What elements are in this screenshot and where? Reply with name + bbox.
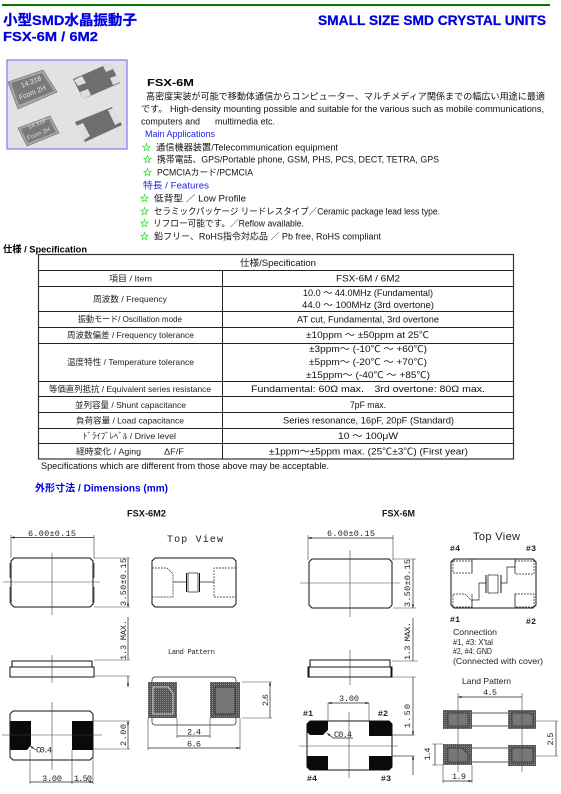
row: aging: ±1ppm～±5ppm max. (25℃±3℃) (First year)	[269, 446, 468, 456]
drawing: side view: 1.3 MAX.	[403, 622, 413, 660]
connection notes: (Connected with cover)	[453, 656, 543, 666]
label: FSX-6M: FSX-6M	[382, 508, 415, 518]
drawing: land pattern: 1.9	[452, 772, 466, 782]
drawing: bottom view: #1	[303, 709, 313, 719]
main applications list	[142, 129, 439, 178]
drawing: side view	[308, 618, 418, 775]
specification note: Specifications which are different from those above may be acceptable.	[41, 461, 329, 471]
row: equivalent series resistance	[49, 384, 485, 394]
features list: ☆	[140, 218, 149, 228]
drawing: bottom view	[299, 694, 414, 784]
row: load capacitance	[76, 416, 454, 426]
main applications list: ☆	[142, 142, 151, 152]
drawing: land pattern: 2.4	[187, 728, 201, 738]
connection notes: #2, #4: GND	[453, 646, 492, 656]
drawing: land pattern: Land Pattern	[168, 649, 215, 657]
drawing: side view: 1.50	[403, 704, 413, 728]
drawing: top view with pins: #4	[450, 544, 460, 554]
drawing: front outline with dimensions	[3, 529, 130, 615]
drawing: bottom view: #4	[307, 774, 317, 784]
drawing: front outline with dimensions: 3.50±0.15	[119, 558, 129, 606]
row: item: FSX-6M / 6M2	[336, 274, 400, 284]
row: drive level: ﾄﾞﾗｲﾌﾞﾚﾍﾞﾙ / Drive level	[83, 431, 176, 441]
title: Japanese product name: FSX-6M / 6M2	[3, 29, 98, 44]
row: drive level: 10 ～ 100μW	[338, 431, 399, 441]
drawing: bottom view: #3	[381, 774, 391, 784]
drawing: top view: Top View	[167, 534, 223, 546]
row: frequency: 10.0 ～ 44.0MHz (Fundamental)	[303, 288, 433, 298]
main applications list: 通信機器装置/Telecommunication equipment	[156, 142, 338, 152]
main applications list: Main Applications	[145, 129, 215, 139]
row: oscillation mode: 振動モード/ Oscillation mode	[78, 314, 182, 324]
specification table	[38, 254, 514, 459]
row: temperature tolerance	[67, 344, 430, 380]
features list	[140, 180, 440, 242]
product description	[141, 90, 545, 126]
drawing: land pattern: 6.6	[187, 740, 201, 750]
row: load capacitance: 負荷容量 / Load capacitance	[76, 416, 184, 426]
connection notes	[453, 627, 543, 666]
drawing: land pattern	[148, 649, 272, 750]
label: FSX-6M2: FSX-6M2	[127, 508, 166, 518]
row: frequency tolerance	[67, 330, 429, 340]
drawing: land pattern: Land Pattern	[462, 676, 511, 686]
features list: 特長 / Features	[143, 180, 210, 190]
drawing set: FSX-6M2	[2, 508, 272, 784]
drawing: bottom view: #2	[378, 709, 388, 719]
product description: 高密度実装が可能で移動体通信からコンピューター、マルチメディア関係までの幅広い用途に最適	[146, 90, 545, 102]
drawing: land pattern: 4.5	[483, 688, 497, 698]
product intro heading: FSX-6M	[147, 77, 194, 89]
specification heading: 仕様 / Specification	[3, 244, 87, 256]
drawing: front outline with dimensions	[300, 529, 416, 617]
row: temperature tolerance: ±15ppm～ (-40℃ ～ +85℃)	[306, 370, 430, 380]
row: item	[109, 274, 400, 284]
product description: multimedia etc.	[215, 116, 275, 126]
drawing: top view with pins: #1	[450, 615, 460, 625]
row: frequency tolerance: 周波数偏差 / Frequency tolerance	[67, 330, 194, 340]
product photo	[7, 60, 127, 149]
main applications list: 携帯電話、GPS/Portable phone, GSM, PHS, PCS, DECT, TETRA, GPS	[157, 154, 439, 164]
features list: ☆	[140, 232, 149, 242]
row: shunt capacitance: 並列容量 / Shunt capacitance	[75, 400, 186, 410]
drawing: bottom view: 3.00	[42, 774, 62, 784]
row: equivalent series resistance: Fundamental: 60Ω max. 3rd overtone: 80Ω max.	[251, 384, 485, 394]
row: temperature tolerance: ±3ppm～ (-10℃ ～ +60℃)	[309, 344, 427, 354]
drawing: front outline with dimensions: 6.00±0.15	[28, 529, 76, 539]
main applications list: PCMCIAカード/PCMCIA	[157, 168, 253, 178]
dimensions heading: 外形寸法 / Dimensions (mm)	[35, 482, 168, 494]
row: frequency tolerance: ±10ppm ～ ±50ppm at 25℃	[306, 330, 429, 340]
row: equivalent series resistance: 等価直列抵抗 / Equivalent series resistance	[49, 384, 211, 394]
row: drive level	[83, 431, 399, 441]
drawing: land pattern: 2.6	[261, 694, 271, 706]
row: frequency	[93, 288, 434, 310]
row: shunt capacitance: 7pF max.	[350, 400, 386, 410]
row: load capacitance: Series resonance, 16pF, 20pF (Standard)	[283, 416, 454, 426]
drawing: bottom view: C0.4	[36, 746, 52, 756]
drawing: bottom view: C0.4	[334, 730, 352, 740]
title: English: SMALL SIZE SMD CRYSTAL UNITS	[318, 13, 546, 28]
row: aging	[76, 446, 468, 456]
row: item: 項目 / Item	[109, 274, 152, 284]
row: temperature tolerance: 温度特性 / Temperature tolerance	[67, 357, 194, 367]
row: frequency: 44.0 ～ 100MHz (3rd overtone)	[302, 300, 434, 310]
drawing: side view: 1.3 MAX.	[119, 620, 129, 660]
drawing: top view with pins: #3	[526, 544, 536, 554]
product photo: 14.318	[28, 118, 47, 131]
product photo: Fcom 2H	[27, 127, 51, 142]
drawing: side view	[10, 617, 130, 687]
drawing set: FSX-6M	[299, 508, 558, 784]
drawing: top view	[152, 534, 236, 607]
table header: 仕様/Specification	[240, 257, 316, 268]
features list: ☆	[140, 194, 149, 204]
row: aging: 経時変化 / Aging	[76, 446, 141, 456]
drawing: top view with pins: Top View	[473, 531, 520, 543]
features list: リフロー可能です。／Reflow available.	[153, 218, 304, 228]
drawing: bottom view	[2, 702, 130, 784]
row: frequency: 周波数 / Frequency	[93, 294, 168, 304]
main applications list: ☆	[143, 154, 152, 164]
drawing: bottom view: 1.50	[74, 774, 92, 784]
connection notes: Connection	[453, 627, 497, 637]
main applications list: ☆	[143, 168, 152, 178]
product description: computers and	[141, 116, 200, 126]
row: shunt capacitance	[75, 400, 386, 410]
features list: 低背型 ／ Low Profile	[154, 192, 246, 204]
drawing: land pattern: 2.5	[546, 732, 556, 746]
row: oscillation mode	[78, 314, 439, 324]
product description: です。 High-density mounting possible and suitable for the various such as mobile communications,	[141, 104, 544, 114]
row: oscillation mode: AT cut, Fundamental, 3rd overtone	[297, 314, 439, 324]
features list: 鉛フリー、RoHS指令対応品 ／ Pb free, RoHS compliant	[154, 230, 381, 242]
drawing: land pattern	[423, 676, 558, 783]
product photo: 14.318	[20, 75, 43, 90]
drawing: top view with pins: #2	[526, 617, 536, 627]
drawing: top view with pins	[450, 531, 536, 627]
drawing: front outline with dimensions: 6.00±0.15	[327, 529, 375, 539]
features list: ☆	[140, 206, 149, 216]
drawing: bottom view: 3.00	[339, 694, 359, 704]
features list: セラミックパッケージ リードレスタイプ／Ceramic package lead less type.	[154, 206, 440, 216]
title: Japanese product name: 小型SMD水晶振動子	[3, 12, 137, 28]
drawing: bottom view: 2.00	[119, 724, 129, 746]
title: Japanese product name	[3, 12, 137, 44]
drawing: land pattern: 1.4	[423, 748, 433, 760]
row: aging: ΔF/F	[164, 446, 184, 456]
row: temperature tolerance: ±5ppm～ (-20℃ ～ +70℃)	[309, 357, 427, 367]
connection notes: #1, #3: X'tal	[453, 637, 493, 647]
drawing: front outline with dimensions: 3.50±0.15	[403, 559, 413, 607]
product photo: Fcom 2H	[18, 85, 47, 102]
